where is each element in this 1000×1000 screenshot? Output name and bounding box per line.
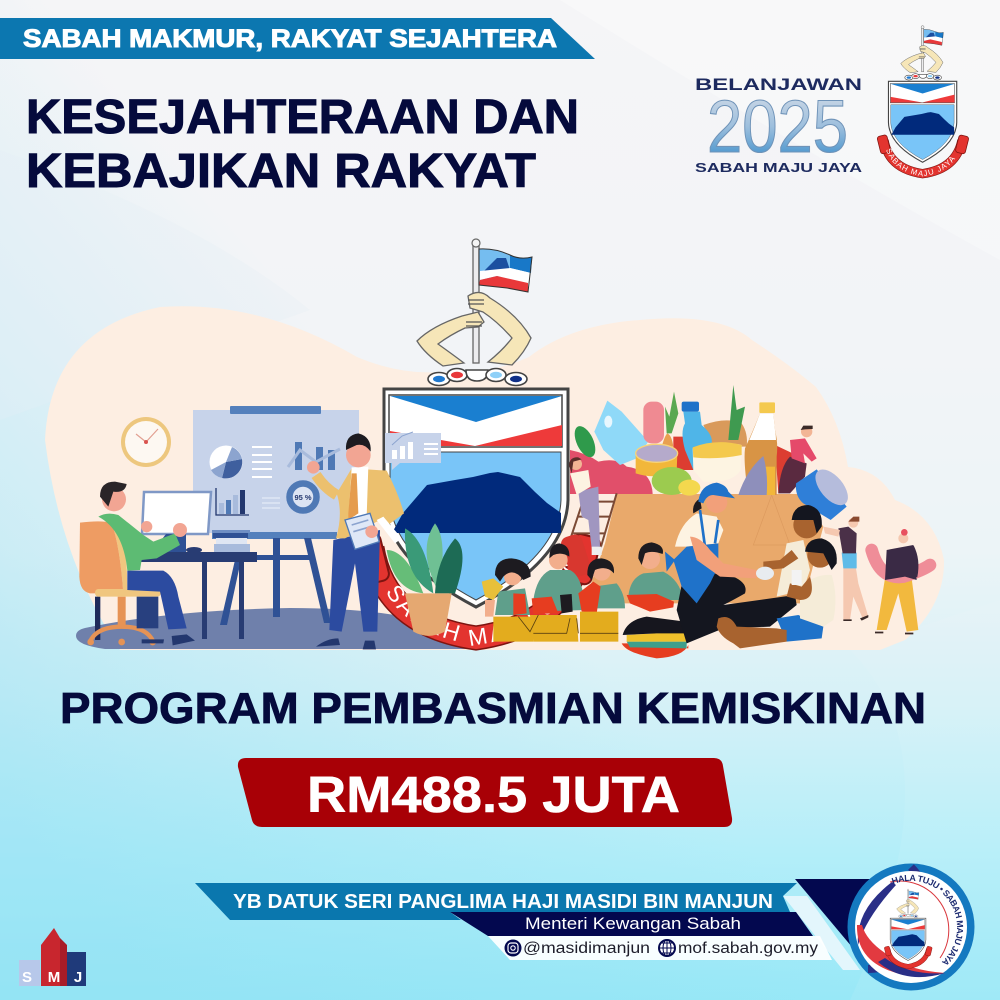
milk carton: [594, 401, 648, 465]
worker one: [482, 558, 531, 617]
right scene: [482, 385, 930, 658]
apple and lemon: [652, 467, 692, 495]
bar chart lower: [216, 488, 249, 515]
red backdrop: [673, 437, 803, 493]
chair: [79, 521, 161, 645]
presenter and plant: [307, 433, 462, 649]
ladder: [570, 493, 617, 550]
worker four: [628, 542, 683, 600]
logo: SMJ: [19, 928, 86, 986]
yellow tub: [693, 443, 742, 482]
computer monitor: [142, 492, 211, 553]
presentation board: [193, 406, 359, 539]
woman in cap: [665, 483, 757, 603]
water bottle: [682, 412, 712, 470]
footer bands: [195, 879, 872, 970]
pie chart: [210, 446, 242, 478]
column chart top: [288, 442, 340, 470]
badge text: HALA TUJU • SABAH MAJU JAYA: [892, 874, 964, 965]
books on desk: [212, 530, 250, 552]
title: KEBAJIKAN RAKYAT: [26, 144, 536, 198]
worker three: [587, 558, 625, 608]
seated man: [98, 482, 195, 645]
logo: Sabah coat of arms: [877, 25, 969, 178]
boy one: [763, 505, 822, 597]
boys legs and shorts: [677, 573, 797, 643]
walking person: [823, 517, 868, 621]
logo: Belanjawan 2025: 2025: [707, 85, 848, 168]
woman carrying sausage: [872, 529, 930, 634]
bag under desk: [137, 597, 158, 628]
emblem main: SABAH MAJU JAYA: [388, 564, 568, 646]
logo: Belanjawan 2025: SABAH MAJU JAYA: [695, 160, 863, 175]
title: KESEJAHTERAAN DAN: [26, 90, 579, 144]
presenter: [307, 433, 404, 649]
sausage: [643, 402, 664, 443]
easel legs: [220, 538, 331, 625]
banner text: SABAH MAKMUR, RAKYAT SEJAHTERA: [23, 25, 557, 53]
logo: Belanjawan 2025: BELANJAWAN: [695, 75, 862, 94]
desk: [140, 552, 257, 639]
logo: SMJ: S: [22, 969, 32, 986]
worker two: [533, 543, 585, 613]
instagram handle: @masidimanjun: [523, 940, 650, 957]
minister name: YB DATUK SERI PANGLIMA HAJI MASIDI BIN MANJUN: [233, 891, 773, 913]
man on top: [778, 426, 817, 493]
carrot: [662, 433, 673, 447]
inner navy swoosh: [878, 958, 945, 977]
navy crescent: [858, 882, 896, 945]
plant: [387, 523, 462, 636]
red bag: [559, 533, 593, 579]
icon: globe: [659, 940, 675, 956]
red crescent: [857, 925, 945, 976]
heading: program: PROGRAM PEMBASMIAN KEMISKINAN: [60, 684, 926, 733]
logo: SMJ: M: [48, 969, 60, 986]
list lines: [252, 447, 272, 477]
left scene figures: [79, 482, 195, 645]
red ring line: [890, 881, 949, 958]
title: [26, 90, 579, 198]
chart callout: [385, 432, 441, 470]
donut 95 percent: 95 %: [294, 493, 312, 502]
spring onions: [728, 385, 745, 440]
boy two: [787, 538, 837, 627]
floor: [76, 608, 472, 649]
amount box: [238, 758, 732, 827]
icon: wall clock: [121, 417, 171, 467]
red garments: [513, 582, 674, 615]
icon: instagram: [504, 940, 522, 956]
blue tin: [796, 464, 854, 520]
yellow boxes: [493, 612, 618, 642]
food parcel: [756, 567, 774, 580]
logo: Hala Tuju badge: [848, 864, 974, 990]
cardboard crate: [590, 494, 823, 603]
peach blob: [45, 306, 944, 650]
fish: [738, 456, 767, 495]
red produce: [570, 450, 653, 494]
donut 95 percent: [290, 484, 316, 510]
woman on ladder: [569, 457, 602, 555]
small list: [262, 498, 280, 508]
amount box: RM488.5 JUTA: [307, 766, 680, 823]
bread: [703, 420, 747, 447]
minister role: Menteri Kewangan Sabah: [525, 915, 741, 933]
mini crest: [884, 889, 932, 966]
canned tin: [636, 453, 677, 476]
logo: Sabah coat of arms: SABAH MAJU JAYA: [886, 148, 956, 176]
sauce bottle: [745, 413, 777, 495]
emblem main: [378, 238, 601, 651]
website: mof.sabah.gov.my: [678, 940, 818, 957]
logo: SMJ: J: [74, 969, 82, 986]
cucumber: [570, 423, 600, 460]
banner top: [0, 18, 595, 59]
clothes pile: [622, 617, 688, 658]
